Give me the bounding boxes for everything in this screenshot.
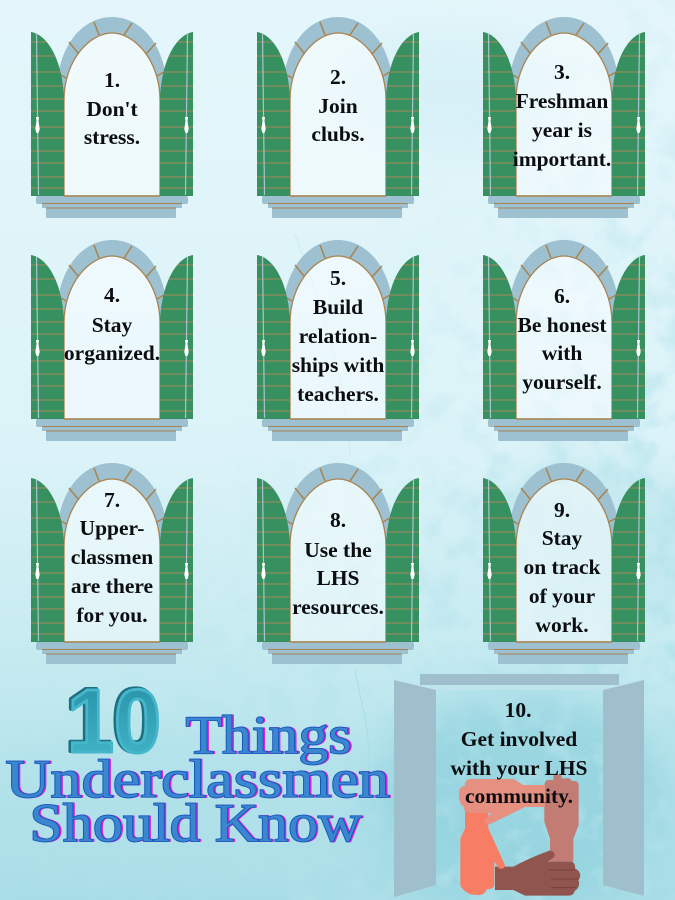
- item 10 text: Get involved: [461, 727, 577, 751]
- window 5: Build relationships with teachers: relation-: [299, 324, 377, 348]
- window 2: Join clubs: [257, 17, 419, 218]
- window 5: Build relationships with teachers: [257, 240, 419, 441]
- window 9: Stay on track of your work: 9.: [554, 498, 570, 522]
- window 6: Be honest with yourself: 6.: [554, 284, 570, 308]
- window 2: Join clubs: Join: [318, 94, 358, 118]
- title line: Things: Things: [186, 705, 352, 765]
- title line: Things: Things: [187, 705, 353, 765]
- item 10 text: 10.: [505, 698, 531, 722]
- window 8: Use the LHS resources: resources.: [292, 595, 384, 619]
- window 8: Use the LHS resources: [257, 463, 419, 664]
- right hand: [544, 775, 579, 862]
- title line: Underclassmen: Underclassmen: [7, 749, 391, 809]
- bottom hand: [495, 850, 580, 896]
- window 7: Upperclassmen are there for you: classmen: [71, 545, 153, 569]
- window 3: Freshman year is important: year is: [532, 118, 592, 142]
- window 7: Upperclassmen are there for you: [31, 463, 193, 664]
- window 7: Upperclassmen are there for you: are there: [71, 574, 153, 598]
- window 5: Build relationships with teachers: teachers.: [297, 382, 379, 406]
- title numeral 10: 10: [65, 671, 159, 771]
- title line: Should Know: Should Know: [31, 793, 363, 853]
- title numeral 10: 10: [67, 672, 161, 772]
- window 6: Be honest with yourself: Be honest: [518, 313, 607, 337]
- title: [6, 671, 391, 853]
- window 6: Be honest with yourself: yourself.: [522, 370, 602, 394]
- window 4: Stay organized: organized.: [64, 341, 160, 365]
- title line: Should Know: Should Know: [30, 793, 362, 853]
- window 2: Join clubs: clubs.: [311, 122, 365, 146]
- window 1: Don't stress: stress.: [84, 125, 140, 149]
- window 7: Upperclassmen are there for you: 7.: [104, 488, 120, 512]
- window 2: Join clubs: 2.: [330, 65, 346, 89]
- window 7: Upperclassmen are there for you: for you.: [76, 603, 148, 627]
- window 4: Stay organized: 4.: [104, 283, 120, 307]
- window 1: Don't stress: 1.: [104, 68, 120, 92]
- window 8: Use the LHS resources: Use the: [304, 538, 372, 562]
- window 4: Stay organized: Stay: [92, 313, 133, 337]
- window 9: Stay on track of your work: on track: [523, 555, 601, 579]
- window 9: Stay on track of your work: [483, 463, 645, 664]
- window 5: Build relationships with teachers: ships with: [292, 353, 384, 377]
- window 8: Use the LHS resources: LHS: [316, 566, 360, 590]
- window 6: Be honest with yourself: with: [542, 341, 582, 365]
- title line: Underclassmen: Underclassmen: [6, 749, 390, 809]
- window 9: Stay on track of your work: work.: [535, 613, 589, 637]
- window 1: Don't stress: Don't: [86, 97, 139, 121]
- item 10 text: community.: [465, 784, 573, 808]
- item 10 text: with your LHS: [450, 756, 588, 780]
- window 6: Be honest with yourself: [483, 240, 645, 441]
- top hand: [459, 779, 545, 824]
- window 1: Don't stress: [31, 17, 193, 218]
- window 5: Build relationships with teachers: 5.: [330, 266, 346, 290]
- window 4: Stay organized: [31, 240, 193, 441]
- window 7: Upperclassmen are there for you: Upper-: [80, 516, 144, 540]
- window 9: Stay on track of your work: of your: [529, 584, 596, 608]
- window 5: Build relationships with teachers: Build: [313, 295, 363, 319]
- window 3: Freshman year is important: 3.: [554, 60, 570, 84]
- window 9: Stay on track of your work: Stay: [542, 526, 583, 550]
- window 8: Use the LHS resources: 8.: [330, 508, 346, 532]
- window 3: Freshman year is important: important.: [513, 147, 611, 171]
- window 3: Freshman year is important: [483, 17, 645, 218]
- left hand: [460, 812, 505, 895]
- item 10 text: [450, 698, 588, 808]
- icon: four joined hands: [459, 775, 580, 896]
- open door frame: item 10: [394, 674, 644, 897]
- window 3: Freshman year is important: Freshman: [516, 89, 608, 113]
